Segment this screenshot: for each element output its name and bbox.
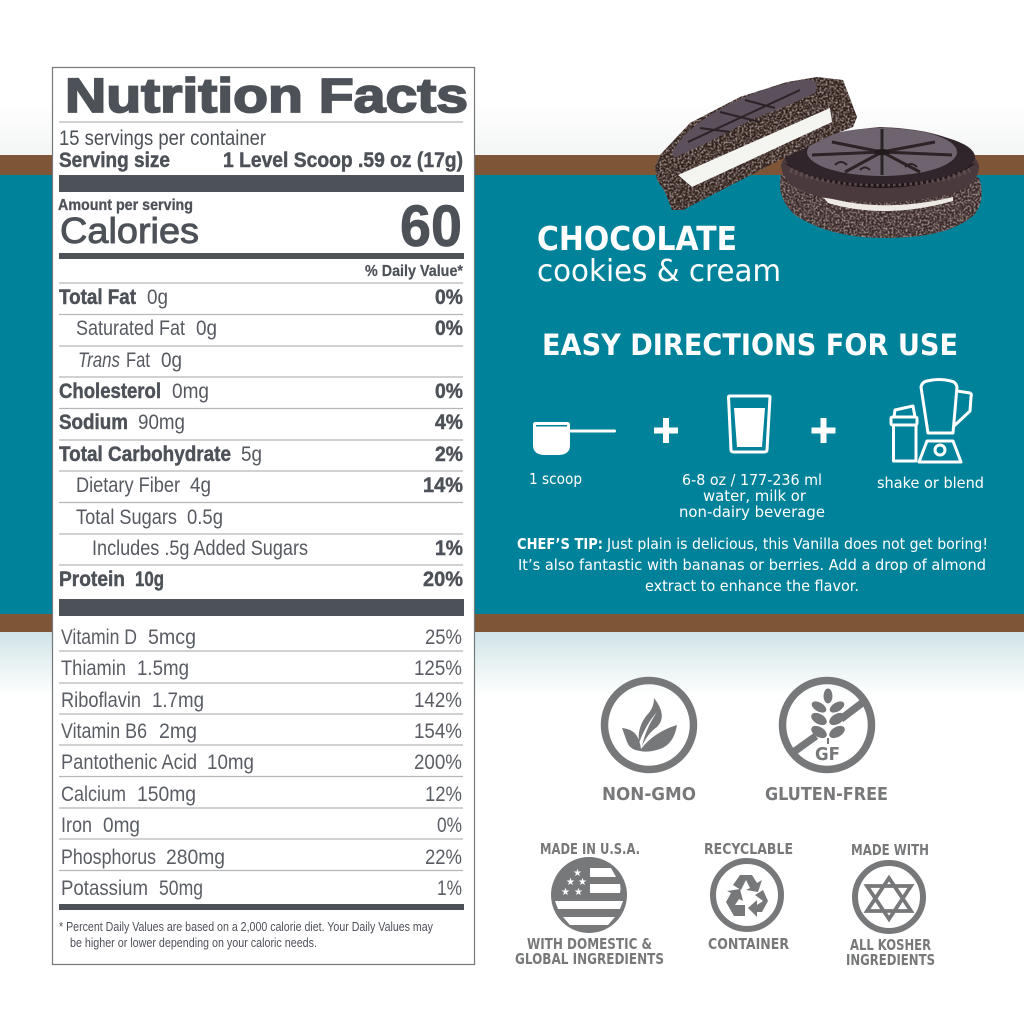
icon: flag circle: ★	[573, 868, 582, 879]
vitamin rows: 0%	[437, 814, 462, 837]
vitamin rows: 12%	[425, 783, 462, 806]
text: chef's tip: It’s also fantastic with bananas or berries. Add a drop of almond	[518, 556, 986, 574]
text: chef's tip: extract to enhance the flavor.	[645, 577, 859, 595]
serving size: 1 Level Scoop .59 oz (17g)	[223, 149, 463, 172]
footnote: * Percent Daily Values are based on a 2,000 calorie diet. Your Daily Values may	[59, 919, 433, 934]
macronutrient rows: 0%	[435, 286, 463, 309]
daily value heading: % Daily Value*	[365, 263, 464, 280]
vitamin rows: 1.5mg	[137, 657, 189, 680]
step: scoop	[529, 422, 616, 488]
vitamin rows: 5mcg	[148, 626, 196, 649]
vitamin rows: Vitamin B6	[61, 720, 147, 743]
macronutrient rows: 1%	[435, 537, 463, 560]
serving size	[59, 149, 463, 172]
vitamin rows: Phosphorus	[61, 846, 156, 869]
servings per container: 15 servings per container	[59, 127, 266, 150]
macronutrient rows: 0%	[435, 380, 463, 403]
vitamin rows: Vitamin D	[61, 626, 137, 649]
vitamin rows: 0mg	[103, 814, 140, 837]
liquid label: non-dairy beverage	[679, 503, 825, 521]
macronutrient rows: Cholesterol	[59, 380, 161, 403]
vitamin rows: 142%	[414, 689, 462, 712]
macronutrient rows: 0%	[435, 317, 463, 340]
macronutrient rows: 0mg	[172, 380, 209, 403]
step: shake or blend	[877, 380, 984, 492]
vitamin rows: 2mg	[159, 720, 197, 743]
macronutrient rows: Total Fat	[59, 286, 136, 309]
shake label: shake or blend	[877, 474, 984, 492]
badge: recyclable: RECYCLABLE	[704, 840, 793, 858]
vitamin rows	[61, 626, 462, 900]
badge: gluten-free	[765, 680, 888, 805]
macronutrient rows	[59, 286, 463, 591]
vitamin rows: 1%	[437, 877, 462, 900]
text: chef's tip	[517, 535, 988, 595]
scoop label: 1 scoop	[529, 470, 582, 488]
image: cookies	[655, 77, 982, 238]
macronutrient rows: 4g	[190, 474, 211, 497]
macronutrient rows: 20%	[423, 568, 463, 591]
left cookie	[655, 77, 857, 210]
badge: made in USA: WITH DOMESTIC &	[527, 935, 652, 953]
vitamin rows: 125%	[414, 657, 462, 680]
vitamin rows: 150mg	[137, 783, 196, 806]
panel: nutrition facts	[52, 68, 474, 964]
vitamin rows: Calcium	[61, 783, 126, 806]
vitamin rows: 280mg	[166, 846, 225, 869]
footnote	[59, 919, 433, 950]
macronutrient rows: 0.5g	[187, 506, 223, 529]
icon: flag circle: ★	[561, 887, 570, 898]
macronutrient rows: 0g	[161, 349, 182, 372]
macronutrient rows: Total Sugars	[76, 506, 177, 529]
vitamin rows: Potassium	[61, 877, 148, 900]
heading: easy directions: EASY DIRECTIONS FOR USE	[542, 328, 958, 362]
vitamin rows: 25%	[425, 626, 462, 649]
vitamin rows: 22%	[425, 846, 462, 869]
macronutrient rows: Dietary Fiber	[76, 474, 180, 497]
icon: flag circle: ★	[574, 887, 583, 898]
macronutrient rows: Fat	[126, 349, 150, 372]
macronutrient rows: 14%	[423, 474, 463, 497]
macronutrient rows: 0g	[147, 286, 168, 309]
calories value: 60	[400, 194, 462, 259]
macronutrient rows: Total Carbohydrate	[59, 443, 231, 466]
macronutrient rows: 5g	[241, 443, 262, 466]
text: chef's tip: Just plain is delicious, this Vanilla does not get boring!	[606, 535, 988, 553]
icon: star of David	[855, 863, 923, 931]
icon: shaker and blender	[891, 380, 971, 462]
macronutrient rows: 90mg	[138, 411, 185, 434]
badge: kosher	[846, 841, 935, 969]
flavour heading: cookies & cream	[537, 254, 781, 289]
icon: plus	[812, 418, 836, 443]
macronutrient rows: Sodium	[59, 411, 128, 434]
macronutrient rows: Saturated Fat	[76, 317, 185, 340]
icon: wheat prohibited: GF	[815, 744, 840, 765]
macronutrient rows: Trans	[78, 349, 120, 372]
icon: recycle	[713, 861, 781, 929]
badge: made in USA: MADE IN U.S.A.	[540, 840, 640, 858]
vitamin rows: Iron	[61, 814, 92, 837]
flavour heading: CHOCOLATE	[537, 219, 737, 258]
badge: recyclable	[704, 840, 793, 953]
badge: non-GMO	[602, 680, 696, 805]
badge: made in USA: GLOBAL INGREDIENTS	[515, 950, 664, 968]
badge: kosher: ALL KOSHER	[850, 936, 931, 954]
badge: recyclable: CONTAINER	[708, 935, 789, 953]
vitamin rows: 1.7mg	[152, 689, 204, 712]
vitamin rows: 10mg	[207, 751, 254, 774]
badge: made in USA	[515, 840, 664, 968]
icon: flag circle: ★	[566, 877, 575, 888]
label: GLUTEN-FREE	[765, 784, 888, 805]
vitamin rows: 50mg	[159, 877, 203, 900]
vitamin rows: 154%	[414, 720, 462, 743]
icon: flag circle: ★	[578, 877, 587, 888]
footnote: be higher or lower depending on your caloric needs.	[70, 935, 317, 950]
icon: glass	[728, 396, 770, 452]
icon: plus	[654, 418, 678, 443]
right cookie	[780, 127, 982, 238]
step: liquid	[679, 396, 825, 521]
icon: scoop	[533, 422, 616, 455]
liquid label	[679, 471, 825, 521]
heading: Nutrition Facts: Nutrition Facts	[65, 70, 468, 123]
icon: flag circle	[551, 857, 627, 933]
background bands	[0, 100, 1024, 696]
macronutrient rows: Protein	[59, 568, 125, 591]
flavour heading	[537, 219, 781, 289]
badge: kosher: MADE WITH	[851, 841, 929, 859]
serving size: Serving size	[59, 149, 170, 172]
macronutrient rows: Includes .5g Added Sugars	[92, 537, 308, 560]
liquid label: 6-8 oz / 177-236 ml	[682, 471, 822, 489]
amount per serving: Amount per serving	[58, 197, 193, 214]
icon: leaves	[604, 680, 694, 770]
macronutrient rows: 4%	[435, 411, 463, 434]
calories label: Calories	[60, 210, 199, 251]
vitamin rows: Pantothenic Acid	[61, 751, 197, 774]
text: chef's tip: CHEF’S TIP:	[517, 535, 603, 553]
liquid label: water, milk or	[703, 487, 807, 505]
vitamin rows: 200%	[414, 751, 462, 774]
macronutrient rows: 0g	[196, 317, 217, 340]
macronutrient rows: 10g	[135, 568, 164, 591]
vitamin rows: Riboflavin	[61, 689, 141, 712]
label: NON-GMO	[602, 784, 696, 805]
vitamin rows: Thiamin	[61, 657, 126, 680]
badge: kosher: INGREDIENTS	[846, 951, 935, 969]
macronutrient rows: 2%	[435, 443, 463, 466]
